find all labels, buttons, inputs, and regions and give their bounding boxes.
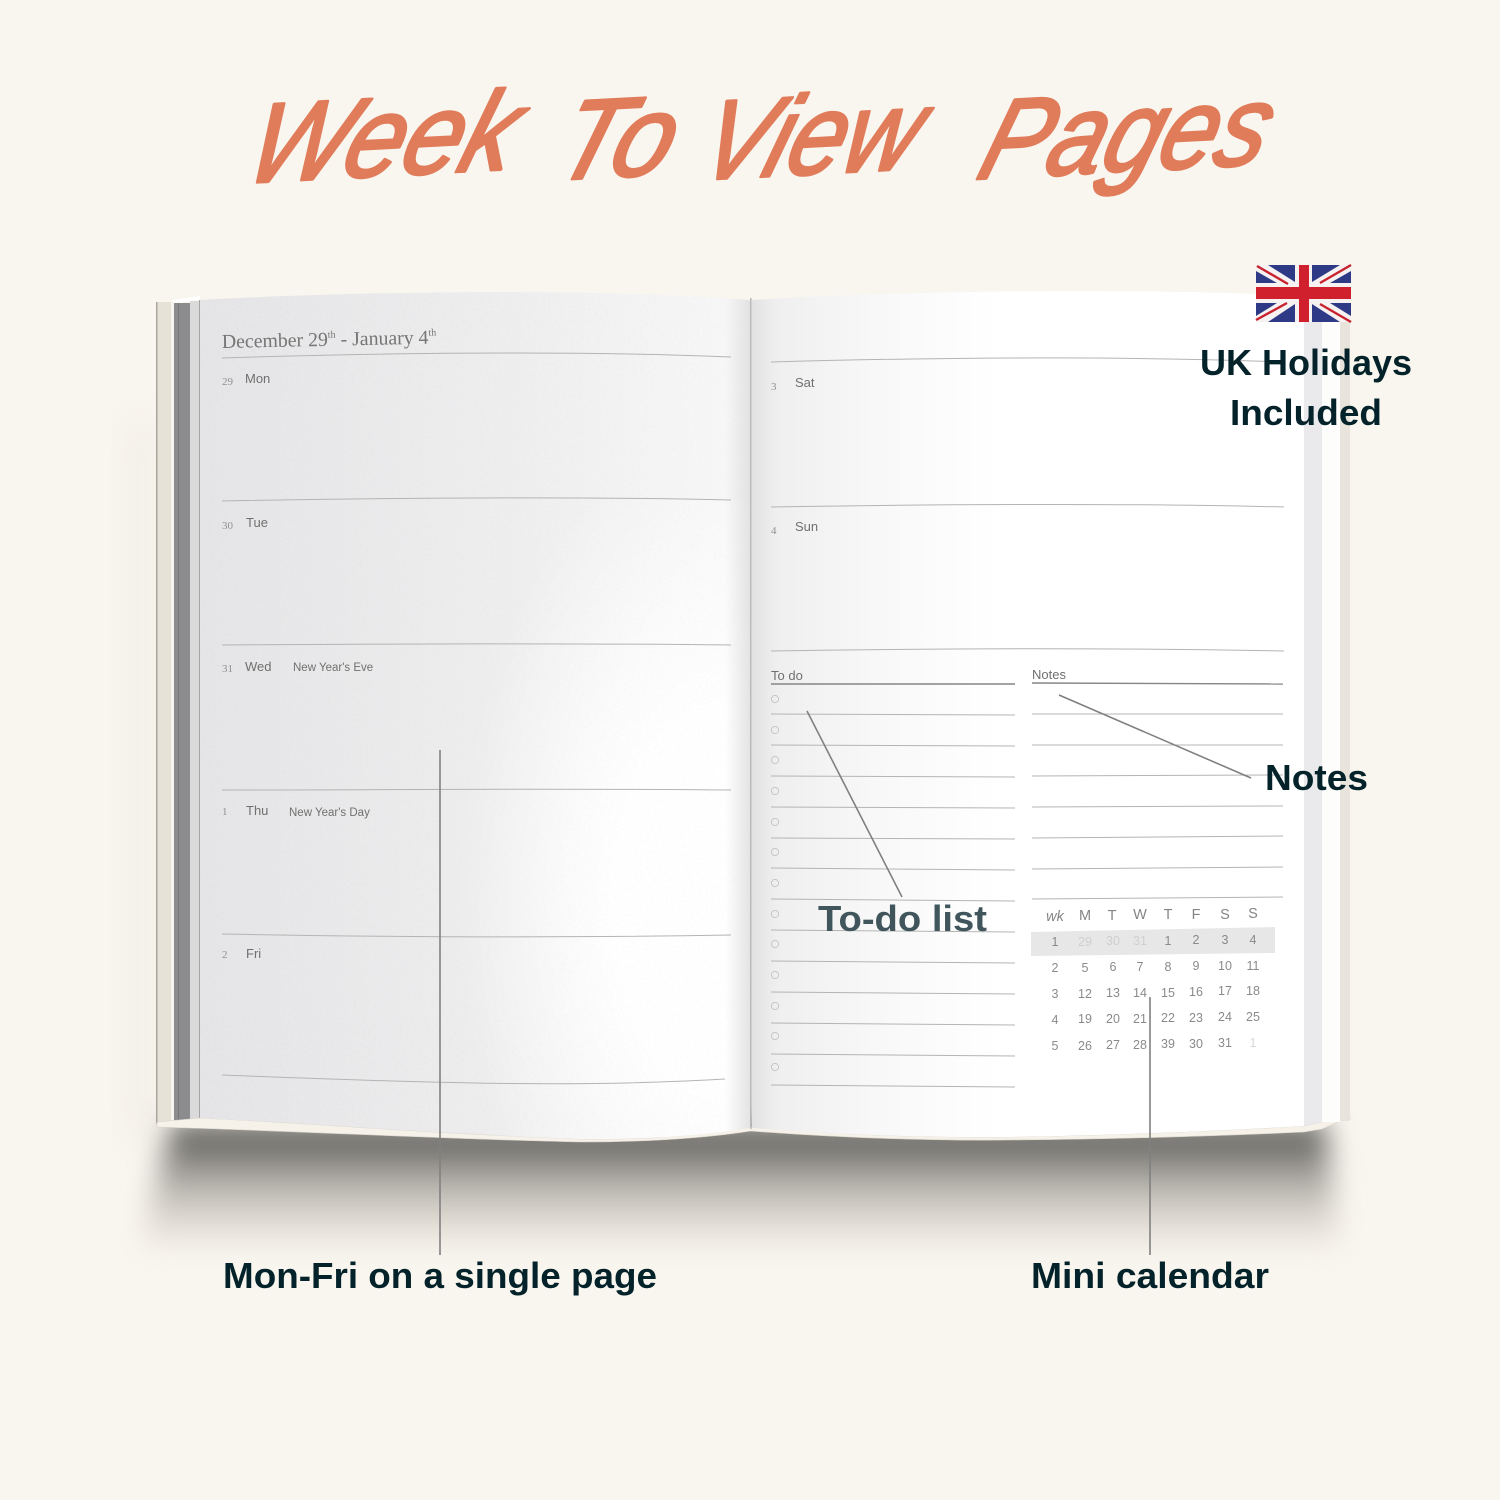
calendar rows: 22 [1161, 1011, 1175, 1025]
calendar rows: 6 [1110, 960, 1117, 974]
calendar rows: 14 [1133, 986, 1147, 1000]
to-do list [771, 668, 1015, 1087]
mini calendar [1031, 906, 1275, 1053]
right page edges [1304, 296, 1350, 1126]
calendar header [1046, 906, 1258, 925]
calendar rows: 20 [1106, 1012, 1120, 1026]
left page content [222, 327, 731, 1084]
gutter [750, 298, 752, 1129]
Sunday: Sun [795, 519, 818, 534]
calendar rows: 5 [1052, 1039, 1059, 1053]
icon: UK flag [1256, 265, 1351, 322]
left page [200, 290, 752, 1150]
Friday: 2 [222, 949, 228, 961]
notes section: Notes [1032, 667, 1066, 682]
Saturday: Sat [795, 375, 815, 390]
Thursday: 1 [222, 806, 228, 818]
calendar rows: 16 [1189, 985, 1203, 999]
title: View [686, 65, 947, 205]
calendar rows: 18 [1246, 984, 1260, 998]
calendar rows: 12 [1078, 987, 1092, 1001]
title: Week [233, 65, 543, 208]
title: Pages [966, 61, 1291, 204]
calendar rows [1052, 933, 1260, 1053]
Wednesday: 31 [222, 663, 233, 675]
calendar rows: 19 [1078, 1012, 1092, 1026]
pointer: Mon-Fri [439, 750, 441, 1255]
calendar header: wk [1046, 909, 1065, 925]
calendar rows: 5 [1082, 961, 1089, 975]
Thursday [222, 803, 370, 819]
calendar rows: 24 [1218, 1010, 1232, 1024]
calendar rows: 3 [1222, 933, 1229, 947]
calendar rows: 15 [1161, 986, 1175, 1000]
label: Mon-Fri on a single page: Mon-Fri on a single page [223, 1255, 657, 1296]
cover bottom strip [157, 1117, 1350, 1142]
Tuesday: Tue [246, 515, 268, 530]
pointer: mini calendar [1149, 997, 1151, 1255]
label: Notes: Notes [1265, 757, 1368, 798]
label: UK Holidays Included: Included [1230, 392, 1382, 433]
calendar rows: 29 [1078, 935, 1092, 949]
label: UK Holidays Included [1200, 342, 1412, 433]
calendar rows: 39 [1161, 1037, 1175, 1051]
calendar rows: 10 [1218, 959, 1232, 973]
Monday: 29 [222, 376, 234, 388]
calendar rows: 4 [1052, 1013, 1059, 1027]
calendar header: S [1248, 906, 1258, 922]
week heading: th [328, 330, 336, 341]
calendar rows: 11 [1247, 959, 1260, 973]
to-do list: To do [771, 668, 803, 683]
calendar header: W [1133, 907, 1147, 923]
Sunday: 4 [771, 525, 777, 537]
calendar rows: 31 [1218, 1036, 1232, 1050]
calendar rows: 26 [1078, 1039, 1092, 1053]
calendar header: F [1192, 907, 1201, 923]
weekend rules [771, 358, 1284, 651]
Thursday: New Year's Day [289, 807, 370, 819]
calendar rows: 1 [1250, 1036, 1257, 1050]
Tuesday: 30 [222, 520, 234, 532]
calendar rows: 3 [1052, 987, 1059, 1001]
calendar rows: 17 [1218, 984, 1232, 998]
left page stack [172, 296, 200, 1121]
calendar header: T [1108, 908, 1117, 924]
title: To [542, 70, 696, 205]
calendar rows: 23 [1189, 1011, 1203, 1025]
Saturday [771, 375, 815, 393]
calendar header: M [1079, 908, 1091, 924]
Thursday: Thu [246, 803, 268, 818]
calendar rows: 1 [1165, 934, 1172, 948]
calendar rows: 4 [1250, 933, 1257, 947]
calendar rows: 31 [1133, 934, 1147, 948]
calendar rows: 8 [1165, 960, 1172, 974]
Wednesday [222, 659, 373, 675]
Wednesday: New Year's Eve [293, 662, 373, 674]
calendar rows: 25 [1246, 1010, 1260, 1024]
calendar rows: 28 [1133, 1038, 1147, 1052]
week heading: th [428, 328, 436, 339]
open planner book [156, 290, 1350, 1150]
calendar header: S [1220, 907, 1230, 923]
calendar rows: 2 [1052, 961, 1059, 975]
Monday: Mon [245, 371, 270, 386]
Friday: Fri [246, 946, 261, 961]
label: To-do list: To-do list [818, 898, 987, 939]
calendar rows: 30 [1106, 934, 1120, 948]
pointer: notes [1059, 695, 1251, 778]
label: UK Holidays Included: UK Holidays [1200, 342, 1412, 383]
Monday [222, 371, 270, 388]
label: Mini calendar: Mini calendar [1031, 1255, 1269, 1296]
pointer: to-do list [807, 711, 902, 897]
right page content [771, 358, 1284, 1087]
Sunday [771, 519, 818, 537]
calendar rows: 27 [1106, 1038, 1120, 1052]
calendar rows: 13 [1106, 986, 1120, 1000]
book shadow [130, 420, 1340, 1247]
title [233, 61, 1291, 208]
day rules [222, 353, 731, 1084]
left cover edge [156, 300, 174, 1124]
Wednesday: Wed [245, 659, 272, 674]
calendar rows: 7 [1137, 960, 1144, 974]
calendar header: T [1164, 907, 1173, 923]
Saturday: 3 [771, 381, 777, 393]
week heading: December 29 [222, 329, 328, 353]
week heading: - January 4 [335, 327, 429, 351]
Friday [222, 946, 261, 961]
Tuesday [222, 515, 268, 532]
calendar rows: 1 [1052, 935, 1059, 949]
calendar rows: 21 [1133, 1012, 1147, 1026]
right page [752, 291, 1304, 1137]
calendar rows: 2 [1193, 933, 1200, 947]
calendar rows: 30 [1189, 1037, 1203, 1051]
calendar rows: 9 [1193, 959, 1200, 973]
